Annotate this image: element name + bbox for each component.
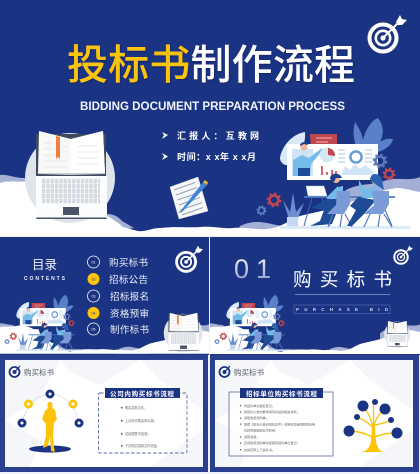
item 01: 购买标书 [109,257,148,269]
panel: bidder flow steps: 到招标单位报名登记； [244,403,275,408]
header label: 购买标书 [24,367,54,377]
item 05 [88,323,149,336]
icon: header target [220,366,230,377]
item 01: 01 [92,260,95,264]
item 02: 02 [92,278,95,282]
panel: bidder flow steps: 按招标公告的要求填写并提供相关资料； [244,409,300,414]
icon: target [394,246,413,264]
english label box [294,305,390,314]
diagram: person with icon arc [18,390,84,452]
panel: bidder flow steps: 反馈收费通知单和发票到招标单位登记； [244,440,300,445]
divider line [295,294,390,295]
item 02 [88,273,148,286]
panel: company flow steps: 上请标书购买申请单； [125,418,157,423]
panel: bidder flow steps: 在指定网上下载标书。 [244,447,275,452]
illustration: laptop [384,321,410,348]
item 05: 制作标书 [110,324,149,336]
item 03: 03 [92,294,95,298]
icon: header target [10,366,20,377]
illustration: team meeting [215,295,292,351]
item 05: 05 [92,328,95,332]
illustration: team meeting [5,295,82,351]
item 01 [88,256,148,269]
panel: bidder flow steps: 按照《招标公告和招标文件》说明在现金捐赠招标单 [244,422,315,426]
panel: bidder flow steps: 招标单位购买标书流程 [246,389,318,398]
diagram: tree with circles [344,399,402,452]
cover clouds [0,175,420,236]
title: 投标书制作流程 [67,42,355,88]
panel: company flow steps [98,388,187,453]
english label box: PURCHASE BID [296,307,389,312]
item 03 [88,290,149,303]
contents heading: 目录 [32,258,57,272]
panel: company flow steps: 下请购买招标文件资金。 [125,443,160,448]
icon: target [177,246,203,271]
icon: target with arrow [370,15,407,52]
panel: bidder flow steps: 领取收费通知单； [244,415,269,420]
slide 4: company purchase flow [0,355,208,472]
slide 5: bidder purchase flow [210,355,419,472]
item 04 [88,307,149,320]
panel: bidder flow steps: 领取发票； [244,434,259,439]
panel: bidder flow steps [229,388,333,456]
header label: 购买标书 [234,367,264,377]
item 04: 资格预审 [110,308,149,320]
panel: company flow steps: 总经理签字批准； [125,431,150,436]
slide 2: contents [0,237,209,355]
item 04: 04 [92,312,95,316]
slide 3: section 01 [210,237,420,355]
illustration: laptop [164,313,202,352]
section number: 01 [234,254,271,284]
item 02: 招标公告 [109,274,148,286]
time line: 时间：x x年 x x月 [177,151,256,162]
icon: note and pen [170,177,208,219]
panel: bidder flow steps: 位财务部缴纳标书费用； [244,428,278,432]
panel: company flow steps: 公司内购买标书流程 [110,389,174,398]
illustration: laptop and open book [25,131,115,223]
contents english label: CONTENTS [24,276,66,282]
item 03: 招标报名 [110,291,149,303]
reporter line: 汇报人：互教网 [177,130,259,141]
section title: 购买标书 [293,269,392,290]
contents clouds [0,323,209,354]
panel: company flow steps: 购买招标文件； [125,405,147,410]
english subtitle: BIDDING DOCUMENT PREPARATION PROCESS [80,99,345,113]
slide 1: cover [0,0,420,236]
illustration: team meeting with dashboard [257,118,410,229]
section clouds [210,323,420,354]
